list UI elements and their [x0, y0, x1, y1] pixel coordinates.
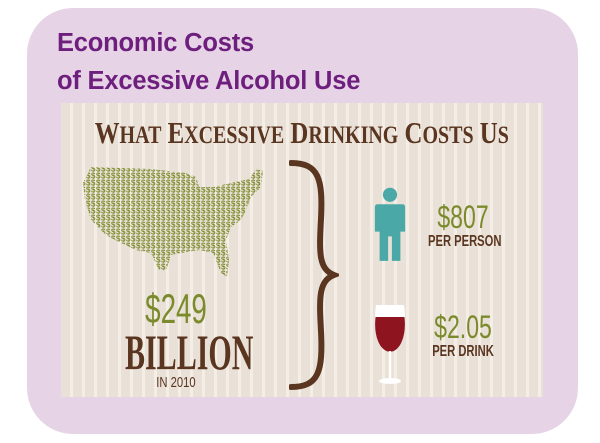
title [57, 29, 360, 95]
total cost text [125, 285, 254, 391]
total cost text: BILLION [125, 324, 253, 380]
per person figure [428, 199, 501, 250]
per drink figure: $2.05 [434, 309, 492, 345]
per drink figure: PER DRINK [432, 343, 494, 360]
title: of Excessive Alcohol Use [57, 67, 360, 95]
per drink figure [432, 309, 494, 360]
title: Economic Costs [57, 29, 254, 57]
heading: WHAT EXCESSIVE DRINKING COSTS US [95, 115, 509, 150]
infographic panel [61, 103, 543, 397]
icon: wine glass [374, 305, 406, 384]
per person figure: $807 [437, 199, 489, 235]
per person figure: PER PERSON [428, 233, 501, 250]
total cost text: IN 2010 [156, 374, 196, 391]
map of US made of dollar signs [83, 167, 263, 276]
brace [289, 160, 339, 390]
total cost text: $249 [145, 285, 207, 332]
icon: person [374, 188, 406, 261]
